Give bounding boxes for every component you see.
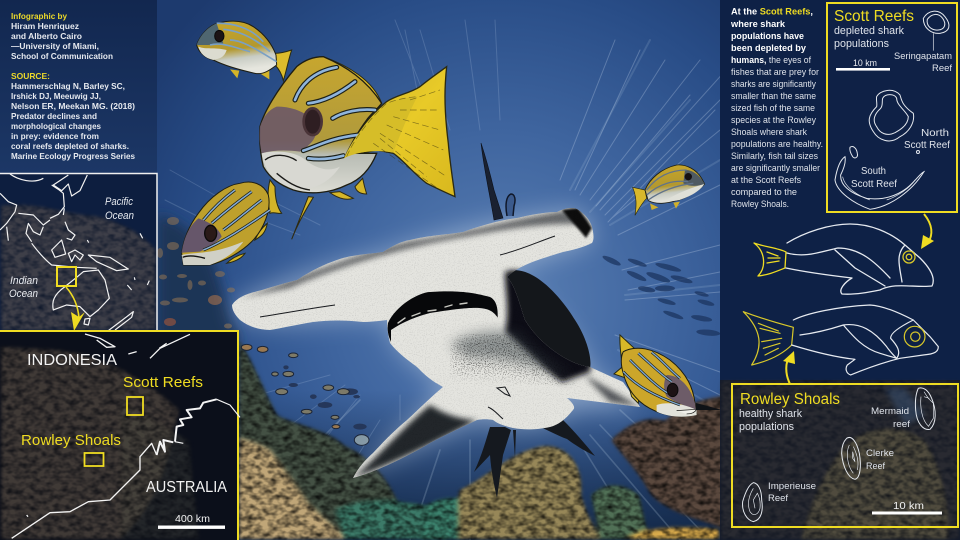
- scale bar: 10 km: 10 km: [893, 501, 924, 512]
- label: Seringapatam Reef: Reef: [932, 63, 952, 74]
- scale bar: 400 km: [158, 514, 225, 529]
- shark glow: [232, 209, 640, 478]
- source citation: in prey: evidence from: [11, 131, 99, 141]
- eye: [903, 251, 915, 263]
- Scott Reefs locator: [127, 397, 143, 415]
- map frame: [0, 174, 157, 331]
- dorsal fin: [481, 143, 503, 220]
- explanatory text: at the Scott Reefs: [731, 174, 801, 185]
- panel: right column: [720, 0, 960, 540]
- source citation: Predator declines and: [11, 111, 97, 121]
- large yellow fish: [260, 57, 455, 239]
- panel: Rowley Shoals map: [732, 384, 958, 527]
- reef outlines: [743, 388, 935, 522]
- coastlines: [0, 174, 149, 331]
- credit names: —University of Miami,: [11, 41, 99, 51]
- dorsal fin: [323, 57, 382, 112]
- shark body: [232, 208, 640, 478]
- Rowley Shoals locator: [84, 453, 104, 466]
- source citation: morphological changes: [11, 121, 101, 131]
- coral reef: bottom centre: [420, 445, 720, 540]
- subheading: healthy shark: [739, 408, 802, 420]
- explanatory text: [730, 6, 823, 209]
- reef haze and small orange fish, left: [157, 215, 238, 345]
- lower fish diagram: big eye and tail: [743, 305, 938, 375]
- scale bar: 400 km: 400 km: [175, 514, 210, 525]
- credit names: School of Communication: [11, 51, 113, 61]
- label: Indonesia: INDONESIA: [27, 352, 118, 369]
- face: [260, 107, 317, 153]
- upper fish diagram: small eye and tail: [754, 224, 933, 294]
- tail: [743, 312, 793, 365]
- label: Mermaid reef: [871, 406, 910, 430]
- blue stripes: [295, 67, 375, 159]
- explanatory text: sized fish of the same: [731, 102, 815, 113]
- label: Seringapatam Reef: Seringapatam: [894, 51, 952, 62]
- credit heading: Infographic by: [11, 11, 67, 21]
- coral reef: bottom right: [610, 395, 725, 530]
- locator box: [57, 267, 76, 286]
- shark fin tip past fish: [696, 403, 722, 410]
- explanatory text: humans, the eyes of: [731, 54, 811, 65]
- source heading: SOURCE:: [11, 71, 50, 81]
- arrow: locator to detail map: [66, 287, 85, 331]
- source citation: Hammerschlag N, Barley SC,: [11, 81, 125, 91]
- label: South Scott Reef: South: [861, 166, 886, 177]
- body: [786, 224, 933, 294]
- explanatory text: sharks are significantly: [731, 78, 816, 89]
- explanatory text: Rowley Shoals.: [731, 198, 789, 209]
- sea darkening toward the sea floor: [157, 390, 727, 540]
- label: Mermaid reef: reef: [893, 419, 910, 430]
- label: Pacific Ocean: Ocean: [105, 210, 134, 222]
- fins: [292, 178, 367, 239]
- small yellow fish, lower right: [614, 335, 697, 417]
- nostril and head lines: [260, 236, 555, 419]
- explanatory text: smaller than the same: [731, 90, 816, 101]
- scale bar: 10 km: [872, 501, 942, 514]
- hammerhead shark: [230, 143, 650, 498]
- small yellow fish, upper right: [633, 165, 705, 215]
- explanatory text: populations have: [731, 30, 804, 41]
- arrow: Rowley Shoals to lower fish: [783, 351, 795, 384]
- panel: detail map: [0, 331, 240, 540]
- label: North Scott Reef: [904, 128, 950, 151]
- label: Mermaid reef: Mermaid: [871, 406, 909, 417]
- coastlines: [12, 334, 240, 538]
- panel: locator map: [0, 173, 157, 331]
- map frame: [0, 331, 238, 540]
- subheading: [739, 408, 802, 433]
- credit names: [11, 21, 113, 61]
- shark back: [505, 270, 590, 378]
- label: Indian Ocean: [9, 275, 38, 300]
- pectoral fin: [344, 97, 417, 158]
- coral reef: left mass: [238, 338, 450, 540]
- second fin loop: [506, 194, 515, 216]
- label: South Scott Reef: Scott Reef: [851, 179, 897, 190]
- school of small fish, left: [241, 344, 369, 445]
- source citation: Irshick DJ, Meeuwig JJ,: [11, 91, 101, 101]
- shark mouth: [388, 291, 498, 342]
- body: [260, 57, 382, 193]
- body: [792, 305, 938, 375]
- reef outlines: [835, 11, 949, 209]
- source citation: Nelson ER, Meekan MG. (2018): [11, 101, 135, 111]
- small yellow fish, left: [182, 180, 282, 265]
- label: Rowley Shoals: Rowley Shoals: [21, 432, 121, 449]
- scale bar: 10 km: 10 km: [853, 58, 877, 68]
- shark teeth: [398, 303, 467, 323]
- explanatory text: been depleted by: [731, 42, 807, 53]
- explanatory text: where shark: [730, 18, 786, 29]
- explanatory text: Shoals where shark: [731, 126, 807, 137]
- lower jaw: [262, 152, 340, 189]
- label: Clerke Reef: Reef: [866, 461, 885, 472]
- source citation: coral reefs depleted of sharks.: [11, 141, 129, 151]
- speckled transitions: [450, 334, 575, 385]
- label: Indian Ocean: Indian: [10, 275, 38, 287]
- source citation: [11, 81, 135, 161]
- explanatory text: Similarly, fish tail sizes: [731, 150, 818, 161]
- credit names: and Alberto Cairo: [11, 31, 82, 41]
- school of small fish, right: [601, 254, 721, 337]
- explanatory text: species at the Rowley: [731, 114, 816, 125]
- subheading: populations: [834, 38, 889, 50]
- tail: [347, 67, 455, 197]
- explanatory text: are significantly smaller: [731, 162, 820, 173]
- source citation: Marine Ecology Progress Series: [11, 151, 135, 161]
- heading: Rowley Shoals: [740, 391, 840, 408]
- label: South Scott Reef: [851, 166, 897, 190]
- explanatory text: At the Scott Reefs,: [731, 6, 813, 16]
- ventral fins and claspers: [474, 420, 595, 498]
- label: North Scott Reef: Scott Reef: [904, 140, 950, 151]
- explanatory text: compared to the: [731, 186, 797, 197]
- tail rays: [347, 90, 447, 190]
- eye: [904, 326, 925, 347]
- left panel: credits: [0, 0, 157, 173]
- label: Australia: AUSTRALIA: [146, 479, 228, 496]
- label: Pacific Ocean: Pacific: [105, 196, 133, 208]
- scale bar: 10 km: [836, 58, 890, 71]
- subheading: [834, 25, 904, 50]
- label: Clerke Reef: Clerke: [866, 448, 894, 459]
- mouth: [265, 155, 310, 190]
- credit names: Hiram Henriquez: [11, 21, 79, 31]
- label: Seringapatam Reef: [894, 51, 952, 74]
- shark shading: [230, 205, 650, 485]
- label: Clerke Reef: [866, 448, 894, 472]
- label: Imperieuse Reef: Reef: [768, 493, 788, 504]
- eye: [304, 108, 322, 135]
- label: Indian Ocean: Ocean: [9, 288, 38, 300]
- arrow: Scott Reefs to upper fish: [921, 214, 934, 249]
- heading: Scott Reefs: [834, 8, 914, 25]
- explanatory text: populations are healthy.: [731, 138, 823, 149]
- subheading: populations: [739, 421, 794, 433]
- panel: Scott Reefs map: [827, 3, 957, 212]
- sun rays: [165, 20, 735, 540]
- tail: [754, 243, 786, 276]
- subheading: depleted shark: [834, 25, 904, 37]
- label: Imperieuse Reef: Imperieuse: [768, 481, 816, 492]
- label: North Scott Reef: North: [921, 128, 949, 139]
- label: Imperieuse Reef: [768, 481, 816, 504]
- label: Pacific Ocean: [105, 196, 134, 222]
- small yellow fish, top: [197, 21, 292, 81]
- label: Scott Reefs: Scott Reefs: [123, 374, 203, 391]
- explanatory text: fishes that are prey for: [731, 66, 819, 77]
